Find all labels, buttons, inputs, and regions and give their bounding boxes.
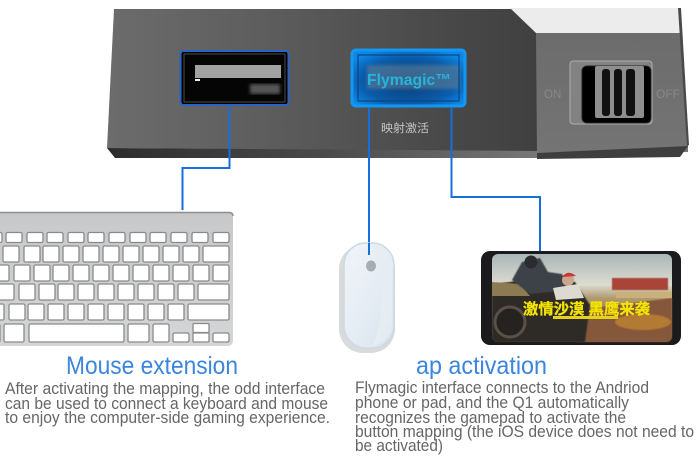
text block: mouse extension description: can be used to connect a keyboard and mouse [5,395,328,413]
heading: ap activation: ap activation [416,352,547,380]
text block: ap activation description: phone or pad, and the Q1 automatically [355,394,630,412]
label: OFF: OFF [656,89,680,101]
text block: mouse extension description: to enjoy the computer-side gaming experience. [5,409,330,427]
smartphone with game screen: 激情沙漠 黑鹰来袭 [523,300,650,318]
Flymagic activation button [352,50,465,106]
text block: ap activation description: recognizes the gamepad to activate the [355,409,626,427]
text block: ap activation description: be activated) [355,437,443,455]
connector line: button to phone [452,108,540,252]
mouse [339,243,395,353]
heading: Mouse extension: Mouse extension [66,352,238,380]
Flymagic activation button: Flymagic™ [367,72,451,89]
device: gamepad converter body [107,8,689,159]
text block: mouse extension description [5,380,330,427]
connector line: USB port to keyboard [182,107,230,210]
USB port [180,51,288,105]
smartphone with game screen [481,251,681,345]
label: mapping activation: 映射激活 [381,121,429,135]
power slide switch [570,61,652,124]
keyboard [0,212,233,346]
text block: mouse extension description: After activating the mapping, the odd interface [5,380,325,398]
connector line: button to mouse [368,108,370,255]
text block: ap activation description: Flymagic interface connects to the Andriod [355,379,649,397]
label: ON: ON [544,89,561,101]
text block: ap activation description [355,379,694,455]
